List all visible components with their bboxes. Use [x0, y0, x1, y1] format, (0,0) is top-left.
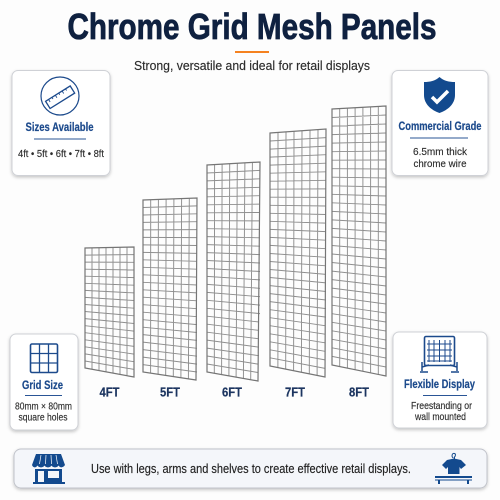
text: wire thickness: [413, 146, 468, 170]
heading: sizes available: Sizes Available: [26, 120, 94, 134]
text: usage statement: Use with legs, arms and shelves to create effective retail displays.: [91, 461, 411, 476]
mesh panel: 5FT: [143, 198, 197, 380]
text: mounting options: Freestanding or: [411, 400, 472, 412]
panel: sizes available: [12, 70, 110, 176]
mesh panel: 7FT: [270, 129, 326, 377]
mesh panel: 6FT: [207, 162, 260, 381]
text: wire thickness: chrome wire: [414, 158, 467, 170]
heading: grid size: Grid Size: [22, 378, 63, 392]
label: 7FT: 7FT: [285, 386, 305, 400]
orange accent divider: [235, 51, 269, 53]
label: 5FT: 5FT: [160, 386, 180, 400]
label: 6FT: 6FT: [222, 386, 242, 400]
icon: freestanding grid: [420, 336, 459, 372]
heading: flexible display: Flexible Display: [404, 377, 475, 391]
label: 8FT: 8FT: [349, 386, 369, 400]
icon: grid: [30, 344, 58, 372]
text: hole size: [15, 400, 72, 424]
icon: shirt on hanger over shelf: [435, 453, 472, 484]
text: size list: 4ft • 5ft • 6ft • 7ft • 8ft: [18, 148, 104, 160]
label: 4FT: 4FT: [100, 386, 120, 400]
text: mounting options: [411, 400, 472, 423]
panel: grid size: [10, 334, 78, 430]
text: mounting options: wall mounted: [414, 411, 466, 423]
panel: flexible display: [393, 332, 487, 428]
icon: ruler in circle: [41, 77, 79, 115]
mesh panel: 4FT: [85, 247, 134, 377]
panel: usage banner: [14, 449, 487, 488]
icon: shield with check: [424, 77, 455, 113]
text: hole size: square holes: [18, 412, 68, 424]
subtitle: Strong, versatile and ideal for retail displays: [134, 59, 370, 73]
mesh panel: 8FT: [332, 106, 386, 376]
text: wire thickness: 6.5mm thick: [413, 146, 468, 158]
icon: storefront: [32, 454, 65, 484]
text: hole size: 80mm × 80mm: [15, 400, 72, 412]
panel: commercial grade: [392, 70, 488, 176]
